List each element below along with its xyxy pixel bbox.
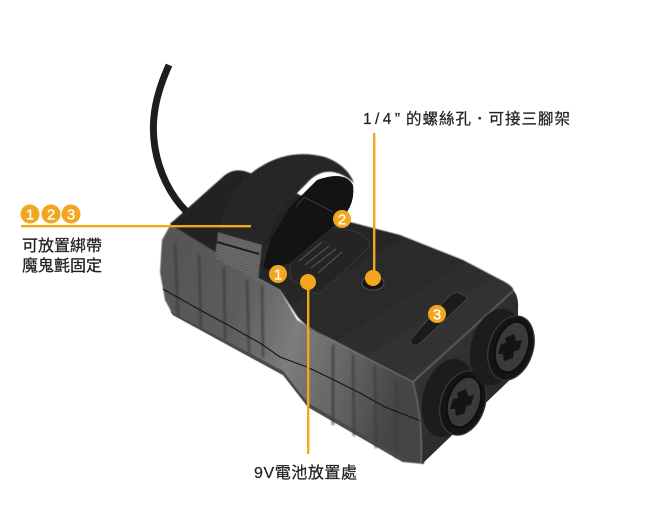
connector left (413, 353, 494, 443)
legend numbers 1 2 3: 3 (67, 206, 75, 224)
marker 1 on device (269, 265, 287, 284)
strap outer mesh (218, 154, 354, 253)
label: screw hole: 1/4” (363, 111, 400, 128)
marker: battery dot (300, 274, 316, 290)
marker 2 on device (333, 210, 351, 228)
label: strap line 1: 可放置綁帶 (22, 237, 102, 255)
legend numbers 1 2 3 (20, 204, 80, 224)
callout: battery leader line (307, 283, 309, 454)
label: screw hole: 的螺絲孔．可接三腳架 (406, 110, 570, 128)
battery door (290, 227, 370, 294)
legend numbers 1 2 3: 1 (26, 206, 34, 224)
label: battery: 9V電池放置處 (254, 464, 357, 482)
door ridges (299, 242, 342, 273)
side shell (160, 222, 430, 464)
device photo: audio adapter (153, 65, 542, 464)
cable (153, 65, 186, 211)
top face (170, 170, 514, 382)
connector right (462, 303, 542, 391)
callout: screw hole leader line (373, 133, 375, 279)
strap lower mesh (215, 232, 262, 281)
marker 1 on device: 1 (274, 266, 282, 284)
tripod screw hole (362, 276, 384, 290)
callout: strap leader line (21, 225, 251, 227)
marker 3 on device: 3 (433, 306, 441, 324)
marker 2 on device: 2 (338, 212, 346, 228)
side lower edge (170, 311, 404, 462)
front corner highlight (413, 291, 513, 463)
velcro strap (215, 154, 354, 281)
front face (413, 290, 518, 464)
marker 3 on device (428, 305, 446, 324)
side ribs (175, 243, 396, 458)
seam line (163, 289, 421, 421)
strap inner velcro (263, 176, 353, 270)
strap slit (296, 197, 333, 212)
marker: screw hole dot (365, 270, 381, 286)
label: strap line 2: 魔鬼氈固定 (22, 256, 102, 275)
clip slider (410, 292, 467, 345)
legend numbers 1 2 3: 2 (47, 206, 55, 224)
